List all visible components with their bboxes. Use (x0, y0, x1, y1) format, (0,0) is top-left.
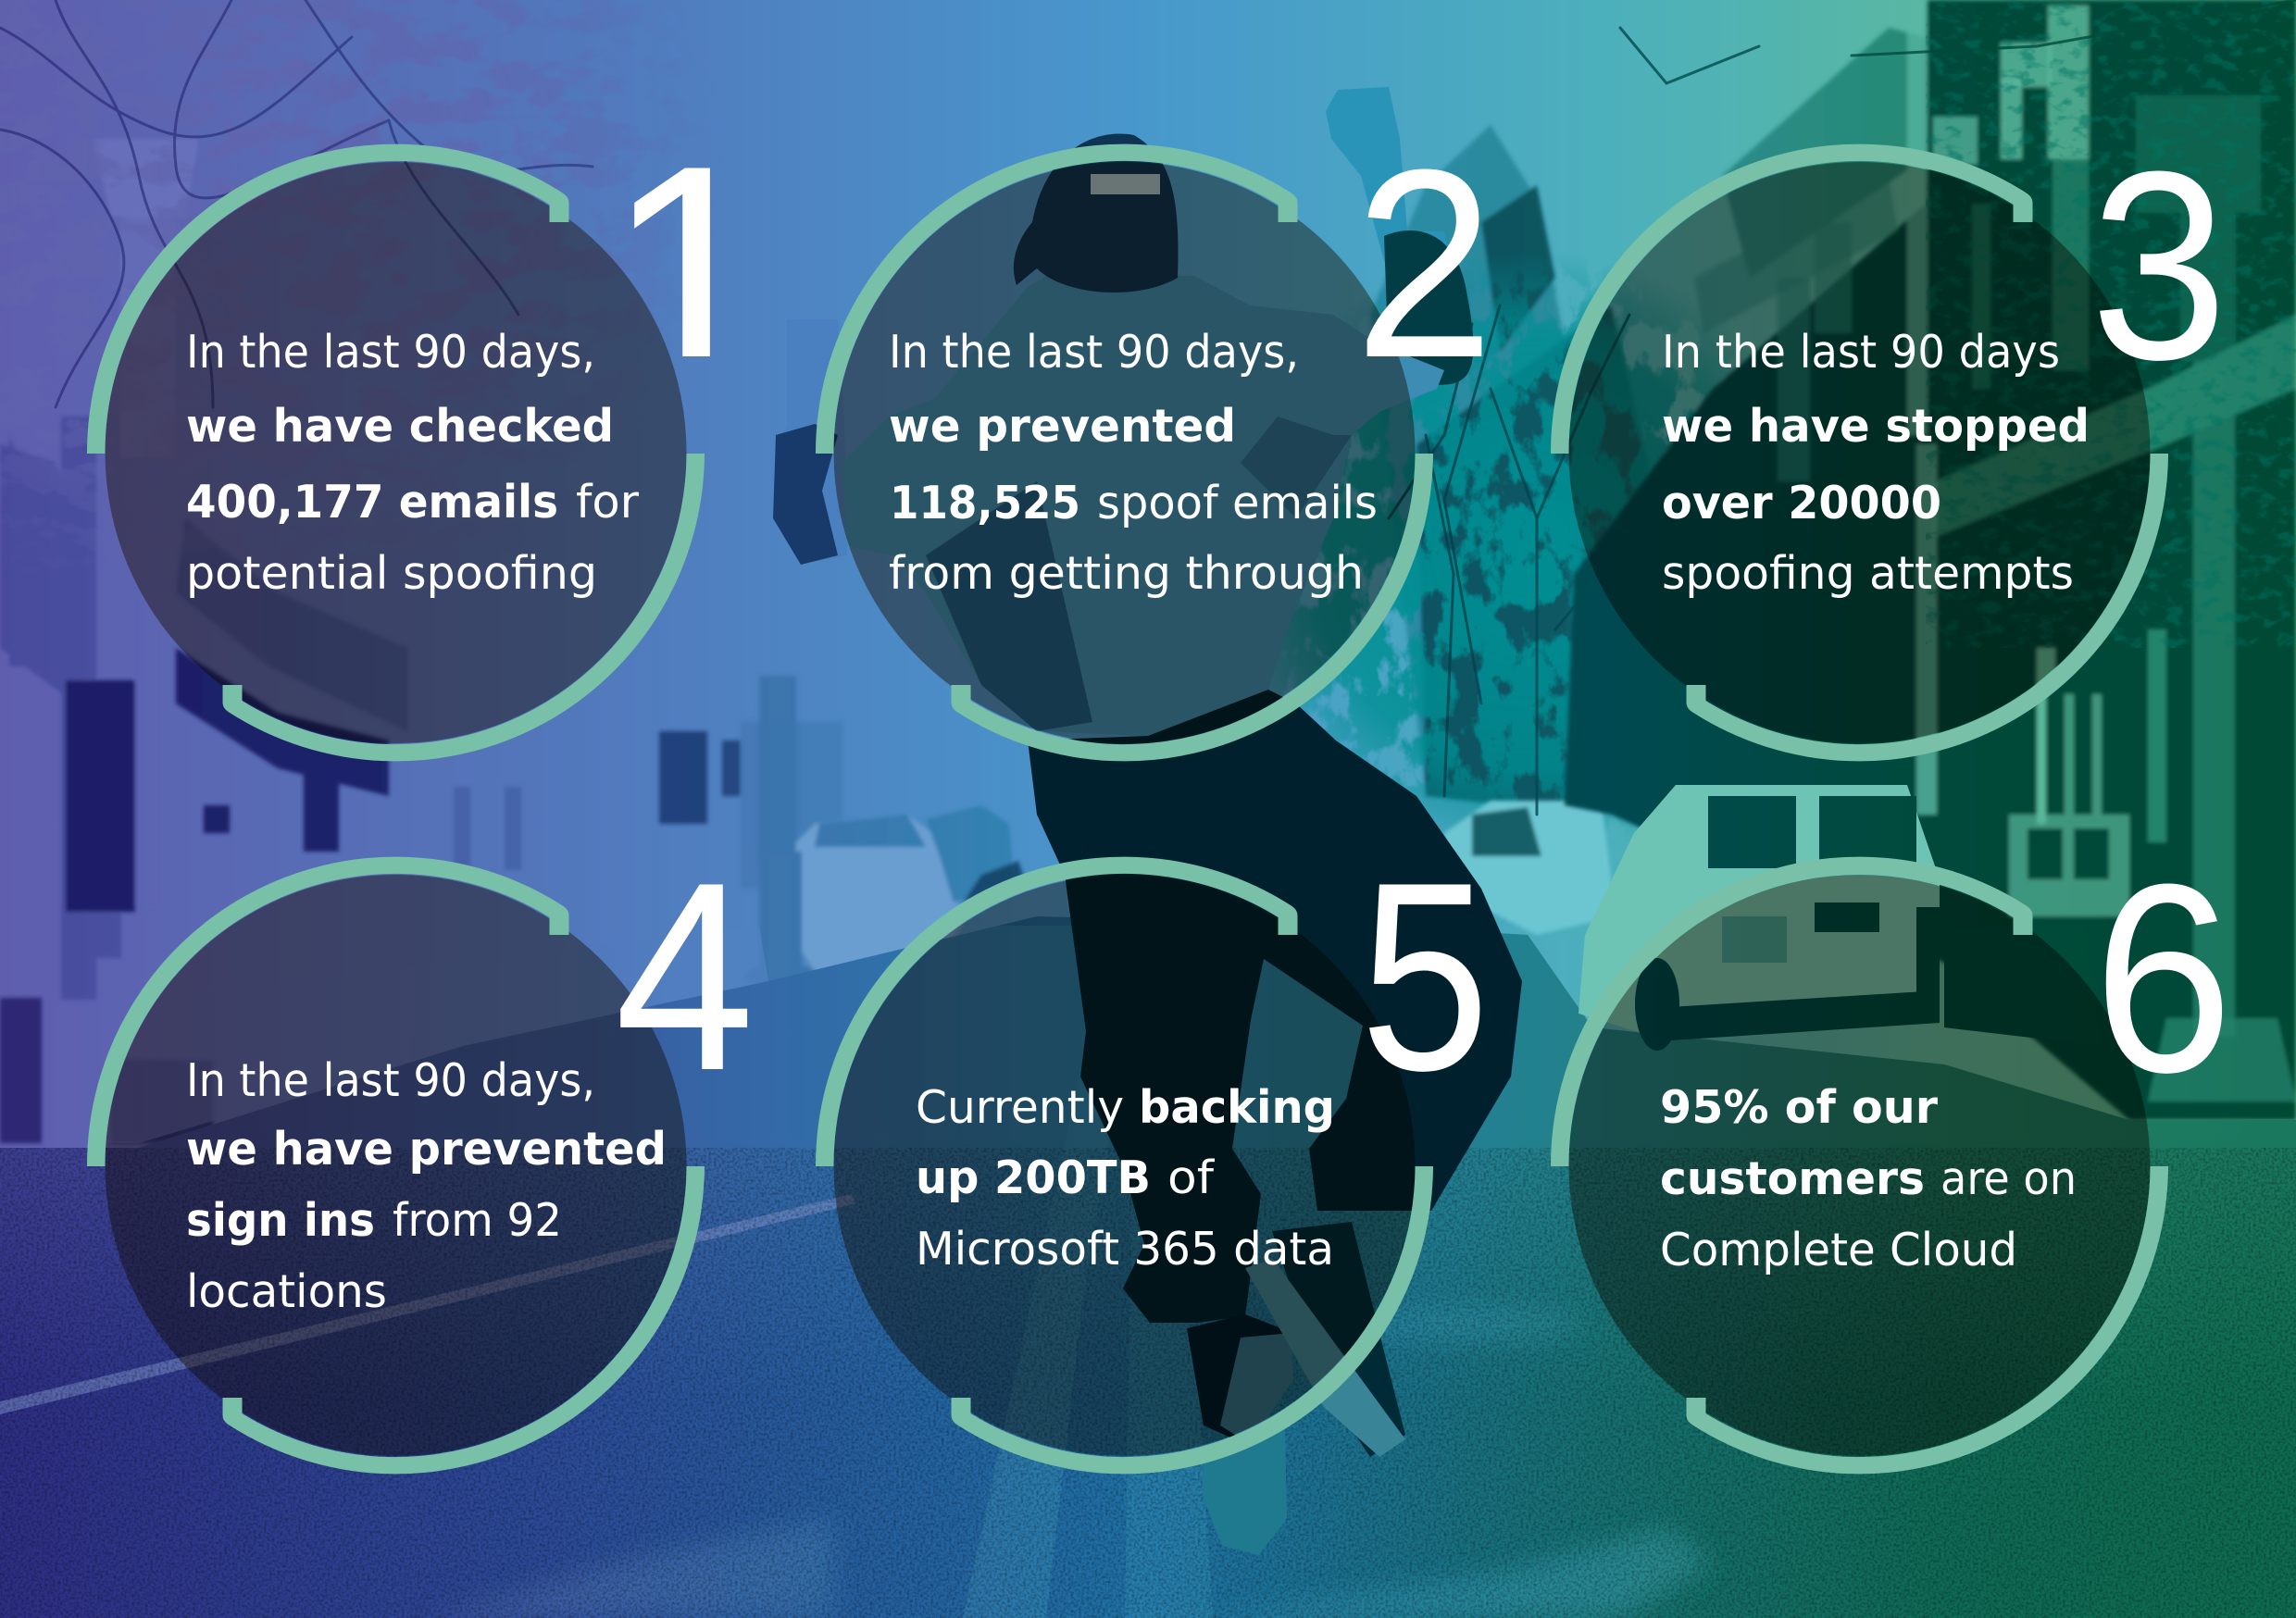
panel: stat 1 emails checked (87, 101, 777, 761)
stat text: 400,177 emails (186, 476, 558, 529)
bare tree branches top left (0, 0, 593, 407)
dark circle backdrop (833, 162, 1415, 743)
stat text: we have stopped (1662, 400, 2090, 453)
stat text: backing (1139, 1081, 1335, 1134)
stat text: spoofing attempts (1662, 547, 2074, 600)
panel: stat 2 spoof emails prevented (816, 114, 1494, 761)
stat text (1660, 1081, 2077, 1276)
stat text (916, 1081, 1335, 1276)
numeral 3: 3 (2090, 116, 2227, 416)
numeral 4: 4 (615, 827, 755, 1126)
dark circle backdrop (106, 875, 687, 1456)
stat text (186, 1054, 667, 1318)
stat text: Currently (916, 1081, 1124, 1134)
raised fist and bare forearm (1326, 87, 1454, 278)
bare tree blotches top left (31, 0, 587, 483)
small white car beyond the van (1444, 801, 1616, 935)
broken ring (816, 144, 1433, 761)
stat text: potential spoofing (186, 547, 597, 600)
sidewalk kerb and snow (56, 926, 768, 1143)
road markings and highlights (0, 1194, 856, 1414)
jumping man (773, 87, 1522, 1555)
dark circle backdrop (106, 162, 687, 743)
denim jacket (842, 276, 1444, 736)
stat text: are on (1940, 1152, 2077, 1205)
street surface (0, 916, 2296, 1618)
stat text: locations (186, 1265, 387, 1318)
broken ring (1551, 857, 2168, 1474)
stat text: customers (1660, 1152, 1925, 1205)
panel: stat 6 customers on Complete Cloud (1551, 828, 2233, 1474)
cap and hair (1014, 133, 1178, 292)
stat text: In the last 90 days, (186, 1054, 595, 1107)
black sleeves (1384, 230, 1474, 385)
broken ring (87, 144, 705, 761)
dark circle backdrop (1568, 162, 2150, 743)
stat text: over 20000 (1662, 477, 1941, 529)
panel: stat 3 spoofing attempts stopped (1551, 116, 2227, 761)
stat text: 118,525 (890, 477, 1080, 529)
trees along the street (1389, 0, 2296, 815)
numeral 1: 1 (605, 101, 777, 447)
dark circle backdrop (833, 875, 1415, 1456)
broken ring (816, 857, 1433, 1474)
panel: stat 5 data backed up (816, 827, 1490, 1474)
broken ring (1551, 144, 2168, 761)
stat text: for (576, 476, 640, 529)
stat text: spoof emails (1097, 477, 1378, 529)
stat text (186, 326, 640, 600)
stat text: we prevented (889, 400, 1236, 453)
right hand brick buildings (1565, 0, 2296, 1120)
stat text: we have checked (186, 400, 614, 453)
stat text: Complete Cloud (1660, 1224, 2017, 1276)
numeral 6: 6 (2093, 828, 2233, 1128)
lighter upper part of the street (0, 926, 2296, 1311)
brick texture (1926, 0, 2296, 648)
dark circle backdrop (1568, 875, 2150, 1456)
panel: stat 4 sign ins prevented (87, 827, 755, 1474)
stat text (1662, 326, 2090, 600)
stat text: of (1167, 1151, 1216, 1204)
stat text: In the last 90 days, (186, 326, 595, 379)
stat text: In the last 90 days, (889, 326, 1299, 379)
black trousers (1028, 690, 1522, 1323)
numeral 5: 5 (1360, 827, 1490, 1126)
sneakers (1187, 1314, 1293, 1444)
road grain (0, 1148, 2296, 1618)
numeral 2: 2 (1354, 114, 1494, 414)
broken ring (87, 857, 705, 1474)
stat text: In the last 90 days (1662, 326, 2060, 379)
stat text: Microsoft 365 data (916, 1223, 1334, 1276)
white van (1578, 785, 2102, 1051)
stat text: from 92 (393, 1194, 562, 1247)
stat text: up 200TB (916, 1151, 1151, 1204)
left storefronts (0, 139, 796, 1143)
stat text: 95% of our (1660, 1081, 1939, 1134)
dark tree mass on the centre right (1270, 264, 1736, 833)
stat text (889, 326, 1378, 600)
stat text: we have prevented (186, 1123, 667, 1176)
centre street buildings and cars (741, 125, 1648, 989)
stat text: sign ins (186, 1194, 375, 1247)
stat text: from getting through (889, 547, 1364, 600)
